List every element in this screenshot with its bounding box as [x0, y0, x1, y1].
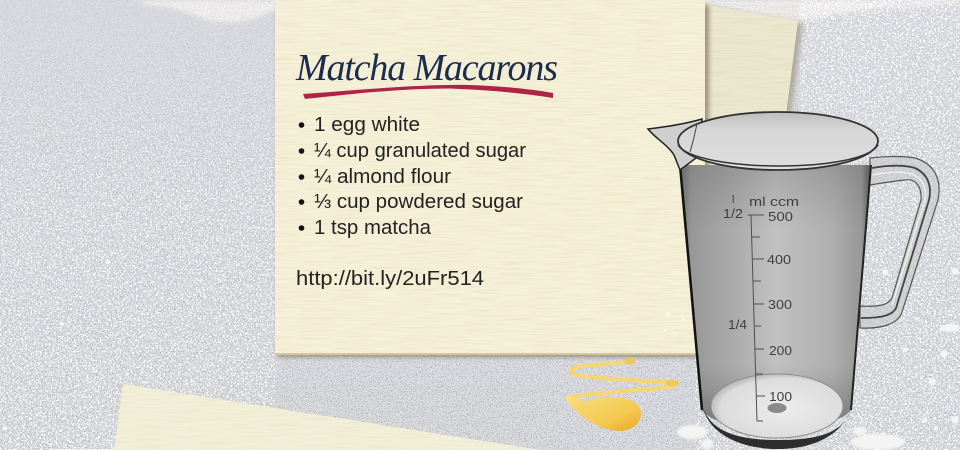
- volume scale: 400: [767, 253, 791, 267]
- volume scale: ml ccm: [749, 195, 799, 209]
- ingredient list: 1 egg white: [314, 113, 420, 136]
- spout: [648, 119, 702, 170]
- jug body: [680, 165, 871, 430]
- volume scale: 200: [769, 344, 792, 358]
- recipe link: http://bit.ly/2uFr514: [296, 267, 484, 290]
- back note paper: [700, 4, 803, 210]
- volume scale: [723, 194, 799, 421]
- red brush underline: [303, 85, 553, 99]
- ingredient list: ¼ almond flour: [314, 165, 451, 188]
- base gate mark: [768, 403, 786, 413]
- jug handle: [860, 156, 939, 328]
- volume scale: 1/2: [723, 207, 743, 221]
- volume scale: 300: [768, 298, 792, 312]
- ingredient list: ⅓ cup powdered sugar: [314, 190, 523, 213]
- recipe title: Matcha Macarons: [295, 47, 558, 89]
- volume scale: l: [732, 194, 734, 206]
- volume scale: 100: [769, 390, 792, 404]
- ingredient list: 1 tsp matcha: [314, 216, 432, 239]
- lower tilted note paper: [50, 384, 560, 450]
- honey drizzle: [564, 358, 679, 431]
- volume scale: 1/4: [728, 318, 747, 332]
- volume scale: 500: [768, 210, 793, 224]
- jug base: [711, 374, 843, 438]
- jug foot: [703, 408, 851, 449]
- flour drift along top edge: [135, 0, 960, 22]
- ingredient list: [299, 113, 526, 239]
- measuring jug: [648, 112, 939, 449]
- flour flecks on card: [664, 312, 684, 334]
- main recipe card: [275, 0, 709, 357]
- flour spots around jug: [60, 260, 960, 450]
- ingredient list: ¼ cup granulated sugar: [314, 139, 526, 162]
- jug rim: [678, 112, 878, 170]
